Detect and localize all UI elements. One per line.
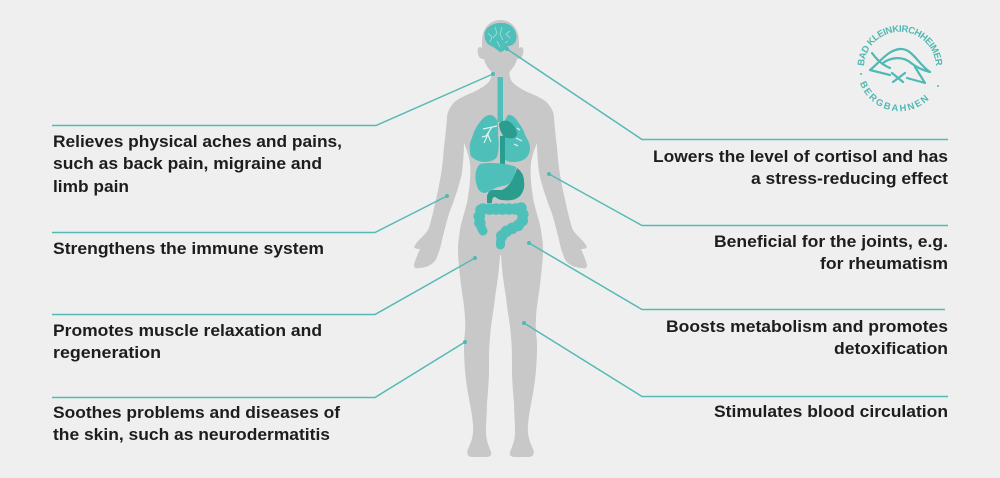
leader: cortisol bbox=[505, 47, 948, 140]
icon: brain bbox=[484, 23, 517, 52]
text: relieves aches and pains bbox=[53, 132, 342, 196]
icon: oesophagus bbox=[500, 136, 505, 167]
text: metabolism bbox=[666, 317, 948, 358]
leader: immune system bbox=[52, 194, 449, 232]
text: muscle relaxation: regeneration bbox=[53, 343, 161, 362]
leader: muscle relaxation bbox=[52, 256, 477, 314]
text: joints: Beneficial for the joints, e.g. bbox=[714, 232, 948, 251]
icon: stomach bbox=[487, 168, 524, 203]
text: metabolism: Boosts metabolism and promotes bbox=[666, 317, 948, 336]
text: strengthens immune system: Strengthens the immune system bbox=[53, 239, 324, 258]
leader: relieves aches bbox=[52, 72, 495, 126]
text: skin problems bbox=[53, 403, 340, 444]
icon: heart bbox=[499, 121, 517, 138]
human body silhouette bbox=[414, 20, 587, 457]
icon: lungs bbox=[470, 115, 530, 162]
leader: skin bbox=[52, 340, 467, 398]
text: joints bbox=[714, 232, 948, 273]
text: relieves aches and pains: limb pain bbox=[53, 177, 129, 196]
leader: blood circulation bbox=[522, 321, 948, 396]
text: cortisol: a stress-reducing effect bbox=[751, 169, 948, 188]
text: cortisol bbox=[653, 147, 948, 188]
text: relieves aches and pains: Relieves physical aches and pains, bbox=[53, 132, 342, 151]
leader: joints bbox=[547, 172, 948, 226]
logo: Bad Kleinkirchheimer Bergbahnen: BAD KLEINKIRCHHEIMER bbox=[858, 25, 942, 66]
text: skin problems: the skin, such as neurodermatitis bbox=[53, 425, 330, 444]
icon: windpipe bbox=[498, 77, 503, 122]
text: cortisol: Lowers the level of cortisol and has bbox=[653, 147, 948, 166]
logo: Bad Kleinkirchheimer Bergbahnen bbox=[858, 25, 942, 112]
text: muscle relaxation bbox=[53, 321, 322, 362]
icon: liver bbox=[475, 163, 516, 193]
text: joints: for rheumatism bbox=[820, 254, 948, 273]
leader: metabolism bbox=[527, 241, 945, 310]
text: muscle relaxation: Promotes muscle relaxation and bbox=[53, 321, 322, 340]
text: metabolism: detoxification bbox=[834, 339, 948, 358]
text: blood circulation: Stimulates blood circulation bbox=[714, 402, 948, 421]
logo: Bad Kleinkirchheimer Bergbahnen: BERGBAHNEN bbox=[860, 80, 929, 112]
text: relieves aches and pains: such as back pain, migraine and bbox=[53, 154, 322, 173]
text: skin problems: Soothes problems and diseases of bbox=[53, 403, 340, 422]
icon: intestine bbox=[479, 208, 523, 245]
